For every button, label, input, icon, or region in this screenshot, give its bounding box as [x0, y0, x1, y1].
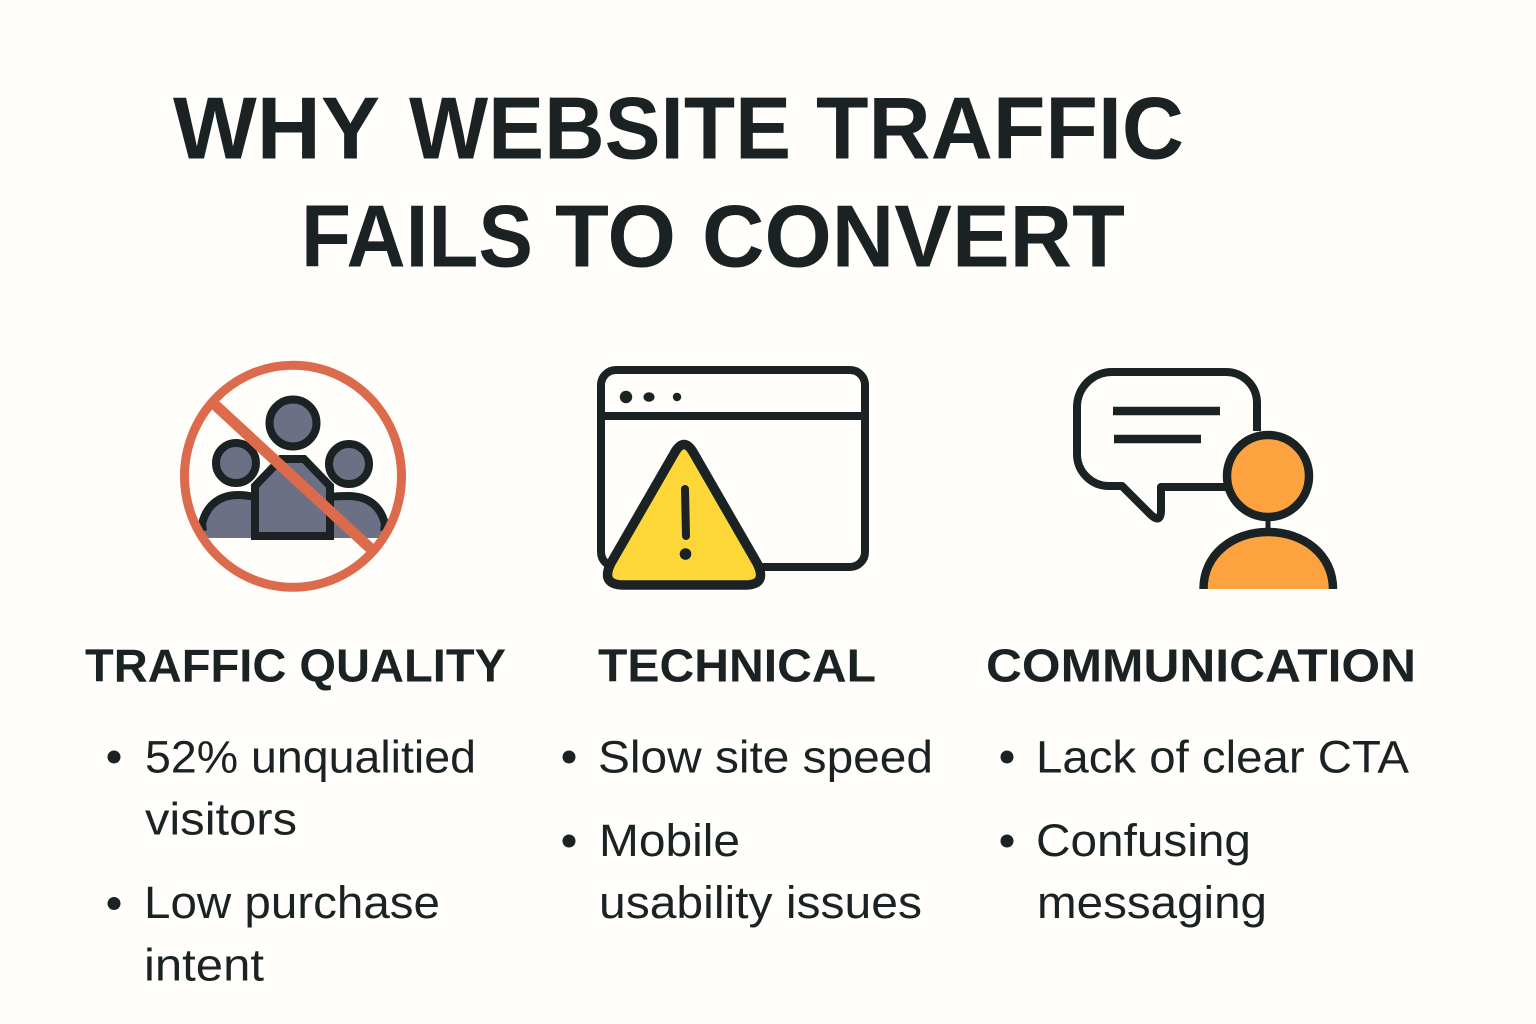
- list: traffic quality: [108, 732, 476, 990]
- title: WEBSITE: [409, 78, 791, 178]
- list: traffic quality: 52% unqualitied: [145, 732, 476, 782]
- list: communication: messaging: [1037, 877, 1267, 928]
- title: [173, 78, 1184, 286]
- list: traffic quality: visitors: [145, 794, 297, 844]
- list: technical: usability issues: [599, 877, 922, 928]
- title: TRAFFIC: [816, 78, 1184, 178]
- list: traffic quality: intent: [144, 940, 265, 990]
- list: communication: [1000, 732, 1409, 928]
- heading: technical: TECHNICAL: [598, 640, 876, 692]
- title: WHY: [173, 78, 380, 178]
- list: technical: Mobile: [599, 815, 740, 866]
- title: TO: [555, 186, 676, 286]
- list: communication: Lack of clear CTA: [1036, 732, 1409, 782]
- list: technical: [562, 732, 933, 928]
- title: FAILS: [301, 186, 533, 286]
- icon: browser window with warning: [600, 370, 866, 585]
- list: traffic quality: Low purchase: [144, 877, 440, 928]
- title: CONVERT: [702, 186, 1125, 286]
- list: communication: Confusing: [1036, 815, 1251, 866]
- icon: crossed-out visitors: [184, 365, 402, 587]
- list: technical: Slow site speed: [598, 732, 933, 782]
- heading: communication: COMMUNICATION: [986, 640, 1416, 692]
- icon: speech bubble and person: [1077, 372, 1333, 589]
- heading: traffic quality: TRAFFIC QUALITY: [85, 640, 506, 692]
